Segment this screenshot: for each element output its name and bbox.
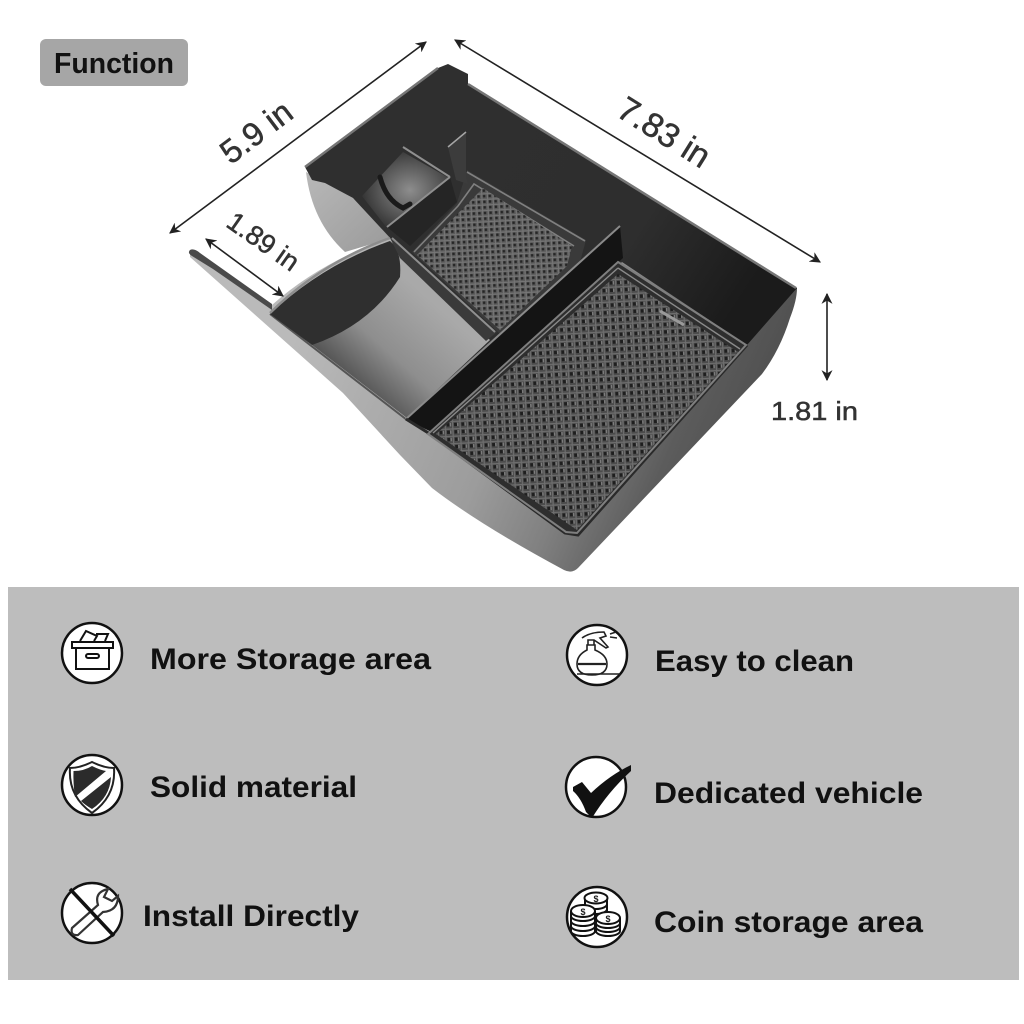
dimension: 1.89 in [206,206,305,296]
icon: check mark [566,757,631,818]
feature: Coin storage area: Coin storage area [654,906,923,939]
dimension: 7.83 in: 7.83 in [610,90,717,176]
curved dark pocket [270,241,400,345]
icon: coin stacks: $ [605,914,611,924]
cup holder recess [362,152,449,228]
icon: coin stacks [567,887,627,947]
curved storage compartment floor [312,258,490,418]
dimension: 5.9 in: 5.9 in [213,93,299,171]
product photo: console organizer tray [189,64,797,572]
icon: coin stacks: $ [593,894,599,904]
cup hook [380,177,410,208]
panel: features [8,587,1019,980]
feature: Easy to clean [567,625,854,685]
feature: Easy to clean: Easy to clean [655,645,854,678]
small mat frame [412,170,586,334]
icon: shield [62,755,122,815]
feature: Install Directly: Install Directly [143,900,359,933]
badge: Function [40,39,188,86]
icon: crossed wrench [62,883,122,943]
feature: Install Directly [62,883,359,943]
left arm dark strip [189,249,272,310]
feature: Solid material [62,755,357,815]
dimension: 1.89 in: 1.89 in [221,206,305,277]
small box wall [387,177,457,246]
small mat [417,188,572,330]
front rim [406,345,747,535]
dark interior [305,64,797,432]
feature: More Storage area: More Storage area [150,643,431,676]
large mat [436,274,738,530]
dimension: 1.81 in [771,294,858,426]
mat clip [660,311,684,325]
sloped divider beside floor [390,238,497,341]
large mat frame [428,262,746,533]
tray outer body [190,230,797,572]
badge: Function: Function [54,48,174,80]
icon: coin stacks: $ [580,907,586,917]
dimension: 7.83 in [455,40,820,262]
feature: Dedicated vehicle [566,757,923,818]
rear wall outside [306,172,392,252]
icon: spray bottle [567,625,627,685]
icon: storage box [62,623,122,683]
dimension: 5.9 in [170,42,426,233]
inner rim edge of arm [270,314,407,420]
main divider [406,226,623,432]
feature: Coin storage area [567,887,923,947]
feature: Solid material: Solid material [150,771,357,804]
small tab [448,132,468,184]
feature: Dedicated vehicle: Dedicated vehicle [654,777,923,810]
dimension: 1.81 in: 1.81 in [771,396,858,426]
feature: More Storage area [62,623,431,683]
rim highlight [305,68,796,288]
